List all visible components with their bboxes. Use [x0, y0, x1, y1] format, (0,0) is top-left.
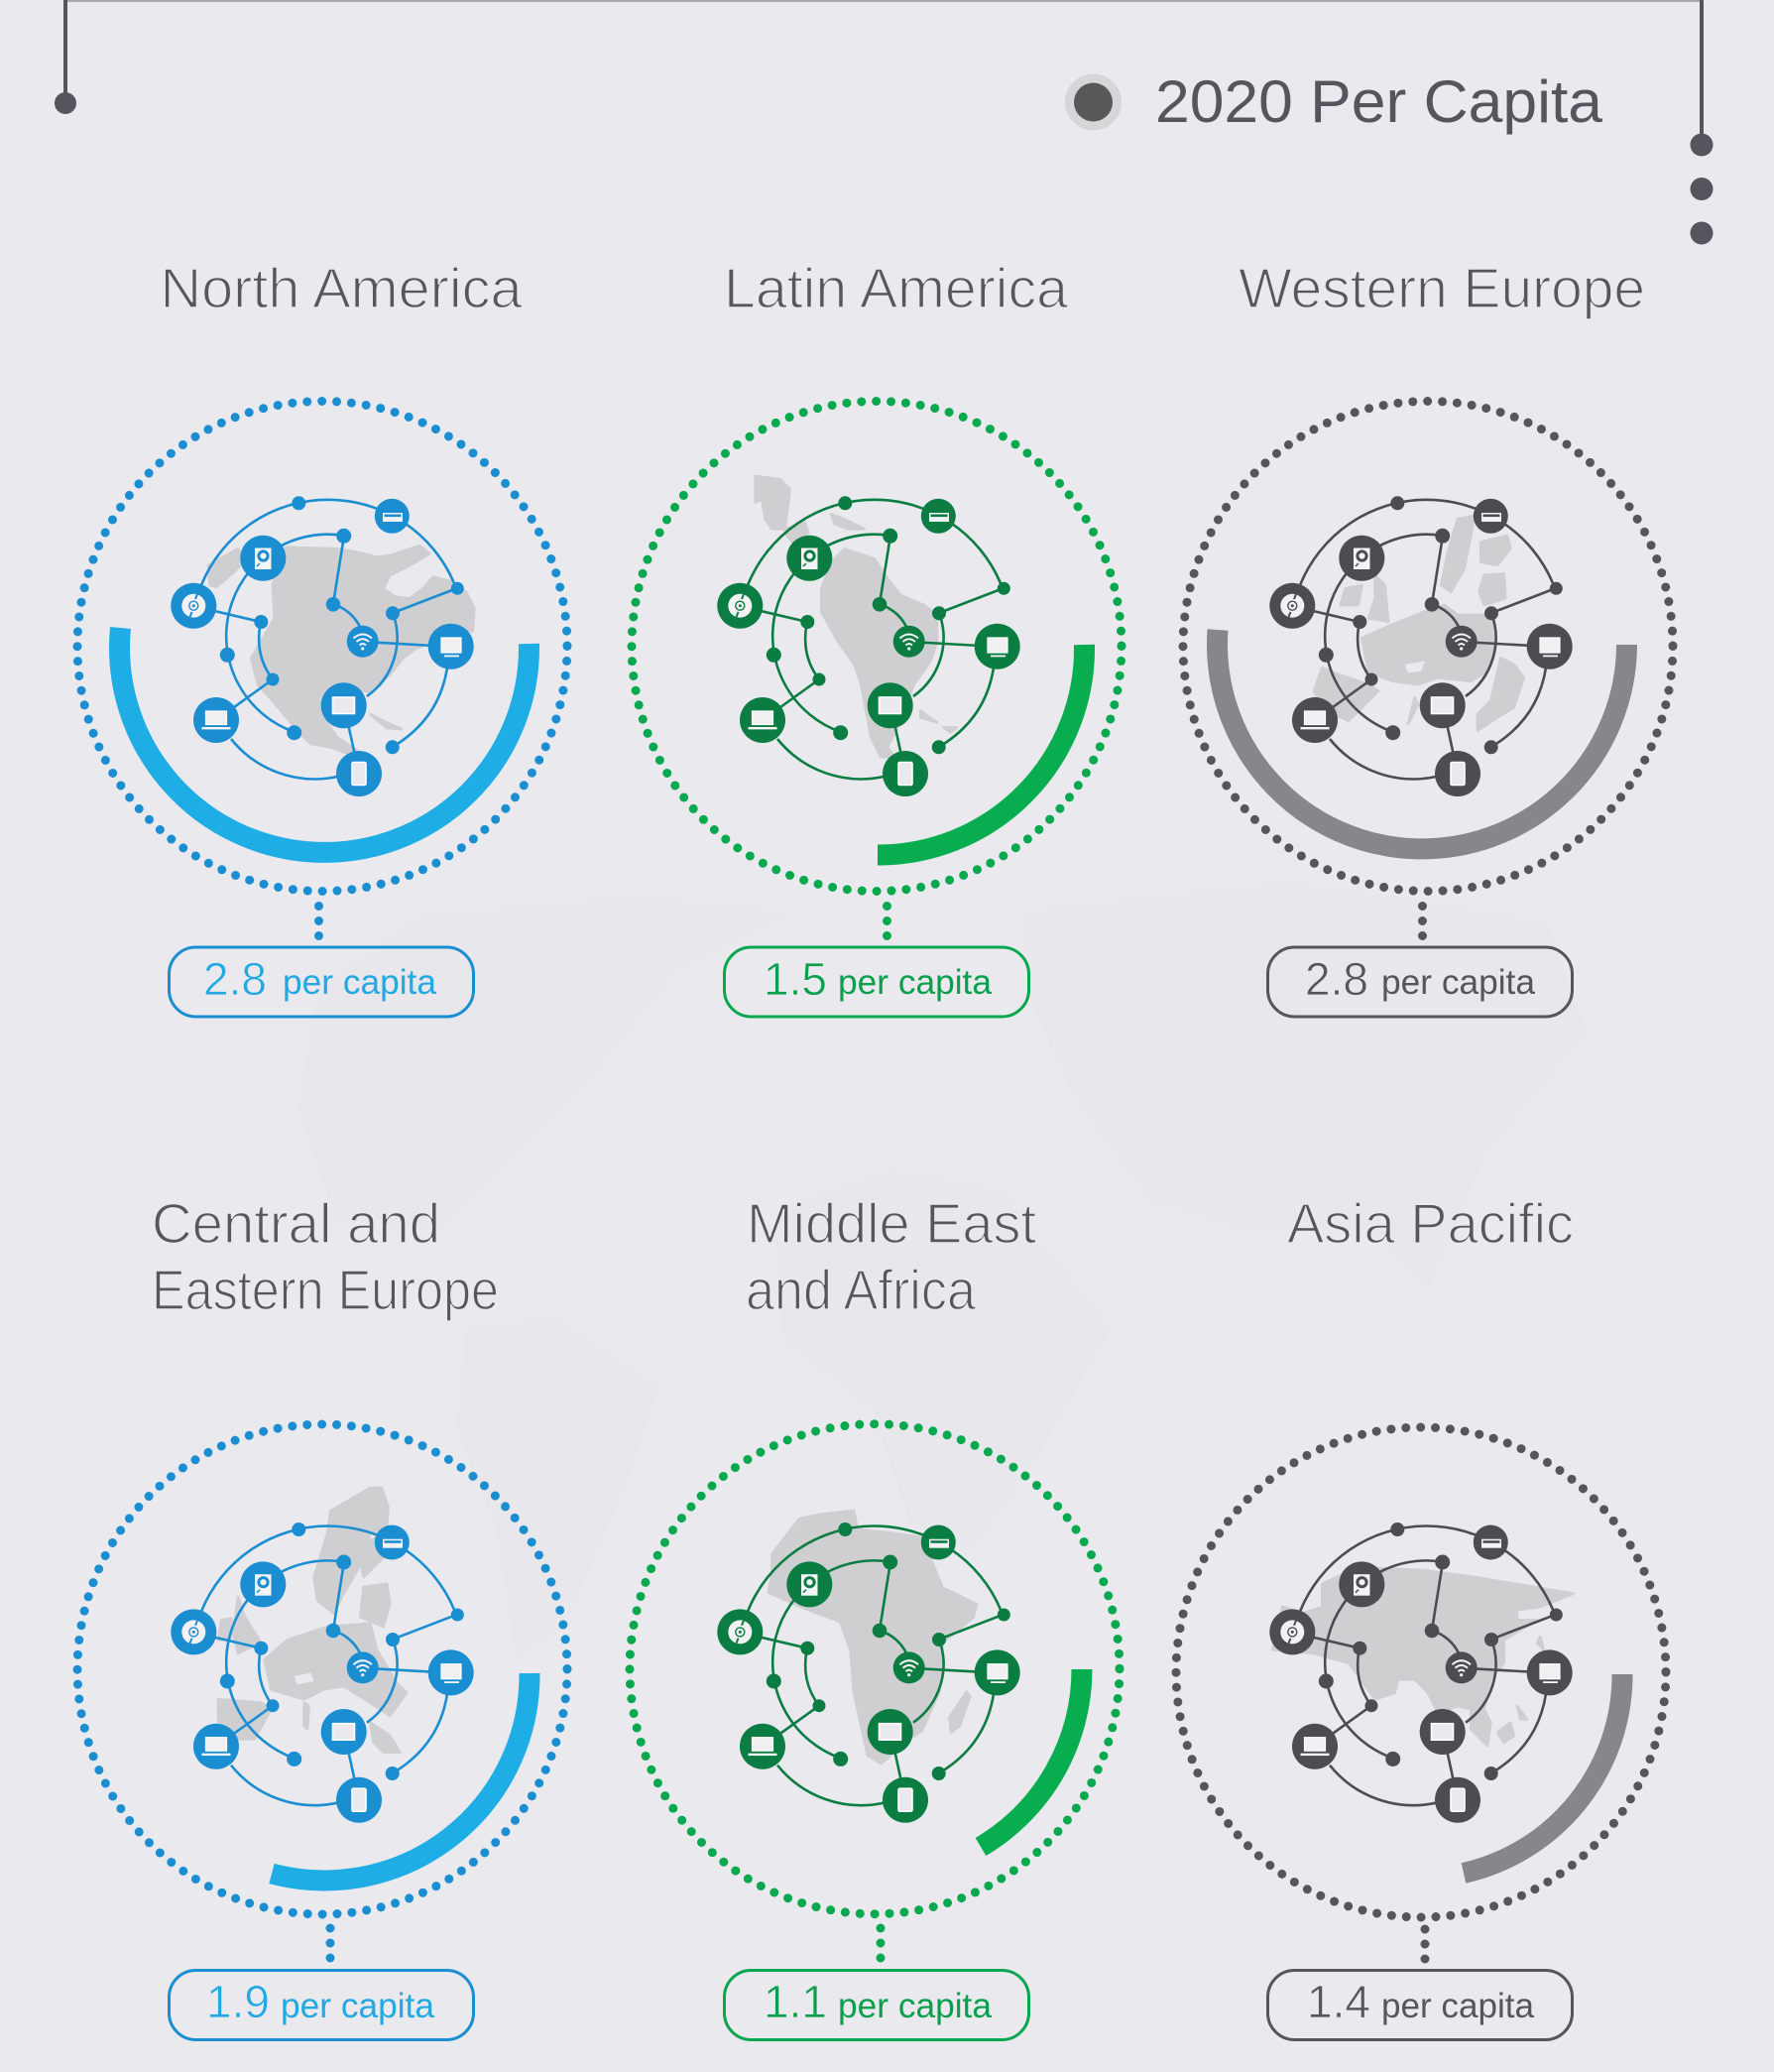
dotted ring — [77, 1424, 567, 1914]
dotted ring — [632, 401, 1122, 891]
value pill: per capita — [838, 963, 993, 1002]
panel: Latin America — [632, 257, 1122, 1017]
device network — [717, 1523, 1020, 1823]
value pill — [1267, 1970, 1573, 2039]
dotted ring — [630, 1424, 1120, 1914]
heading: Western Europe — [1239, 257, 1645, 320]
value pill: 1.1 — [764, 1976, 827, 2027]
value pill: 1.9 — [206, 1976, 270, 2027]
connector dots — [325, 1928, 335, 1960]
value pill — [1267, 947, 1573, 1017]
value pill: 2.8 — [203, 953, 267, 1005]
panel: Middle East and Africa — [630, 1192, 1120, 2039]
value pill — [169, 1970, 474, 2039]
device network — [171, 1523, 474, 1823]
panel: Asia Pacific — [1176, 1192, 1666, 2039]
heading — [746, 1192, 1036, 1322]
value pill — [169, 947, 474, 1017]
value pill: 1.4 — [1307, 1976, 1370, 2027]
legend: 2020 Per Capita: 2020 Per Capita — [1155, 68, 1603, 135]
heading: Latin America — [724, 257, 1068, 320]
value pill: per capita — [838, 1987, 993, 2025]
gauge arc: 1.9 — [272, 1673, 530, 1881]
panel: North America — [77, 257, 567, 1017]
device network — [171, 496, 474, 796]
map silhouette — [1314, 516, 1524, 731]
heading: Eastern Europe — [152, 1259, 499, 1322]
value pill: per capita — [1381, 963, 1536, 1002]
device network — [1269, 496, 1573, 796]
value pill: 2.8 — [1305, 953, 1368, 1005]
device network — [717, 496, 1020, 796]
dotted ring — [77, 401, 567, 891]
heading: Middle East — [747, 1192, 1036, 1256]
connector dots — [1418, 907, 1427, 937]
value pill: 1.5 — [764, 953, 827, 1005]
top connector lines and dots — [55, 0, 1714, 244]
gauge arc: 2.8 — [120, 628, 530, 852]
connector dots — [1420, 1929, 1430, 1961]
value pill: per capita — [1381, 1987, 1535, 2025]
map silhouette — [208, 546, 474, 756]
faint world map — [297, 883, 1587, 1656]
gauge arc: 1.5 — [878, 645, 1085, 855]
panel: Western Europe — [1183, 257, 1673, 1017]
gauge arc: 1.1 — [981, 1669, 1082, 1847]
map silhouette — [756, 476, 957, 757]
panel: Central and Eastern Europe — [77, 1192, 567, 2039]
connector dots — [877, 1928, 885, 1960]
value pill — [724, 947, 1029, 1017]
value pill — [724, 1970, 1029, 2039]
heading — [152, 1192, 499, 1322]
heading: and Africa — [746, 1259, 976, 1322]
connector dots — [314, 907, 323, 937]
dotted ring — [1176, 1427, 1666, 1917]
gauge arc: 2.8 — [1218, 630, 1626, 849]
gauge arc: 1.4 — [1464, 1674, 1622, 1873]
value pill: per capita — [281, 1987, 435, 2025]
connector dots — [883, 907, 891, 937]
heading: Asia Pacific — [1287, 1192, 1574, 1256]
heading: North America — [161, 257, 523, 320]
value pill: per capita — [283, 963, 437, 1002]
map silhouette — [218, 1488, 407, 1753]
dotted ring — [1183, 401, 1673, 891]
heading: Central and — [152, 1192, 440, 1256]
map silhouette — [769, 1511, 977, 1764]
device network — [1269, 1523, 1573, 1823]
map silhouette — [1272, 1567, 1574, 1746]
